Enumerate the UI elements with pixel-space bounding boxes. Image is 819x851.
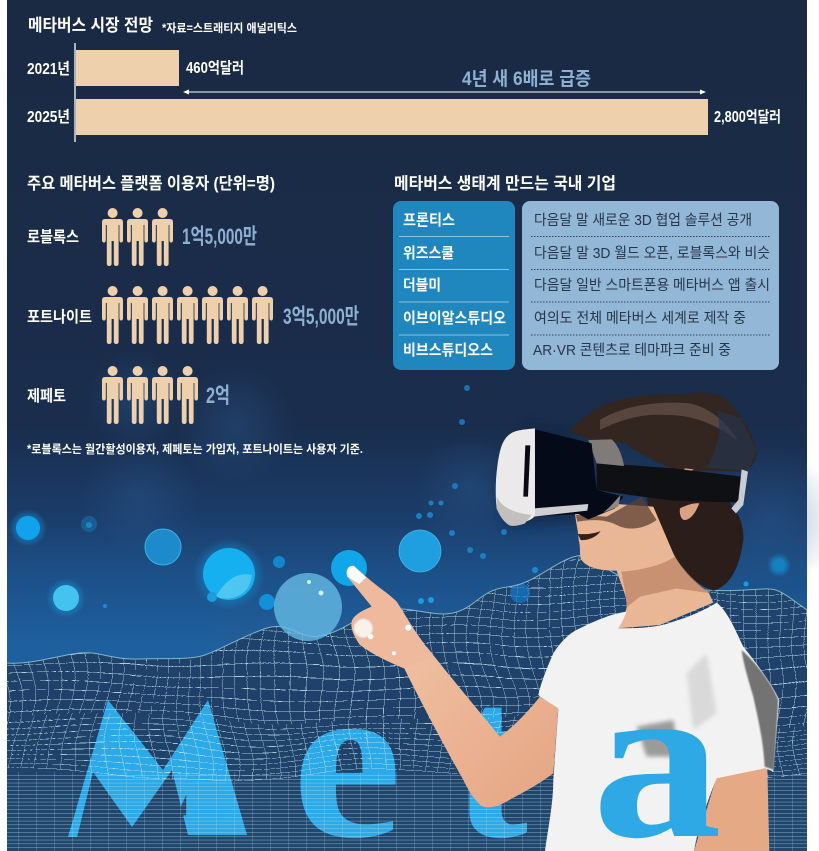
neck and face bbox=[575, 503, 713, 628]
source note: *자료=스트래티지 애널리틱스 bbox=[162, 21, 297, 35]
panel: company names: 위즈스쿨 bbox=[403, 245, 454, 262]
domestic companies section bbox=[393, 174, 779, 370]
heading: market outlook: 메타버스 시장 전망 bbox=[28, 16, 153, 35]
panel: company names bbox=[393, 201, 515, 370]
ear bbox=[680, 503, 699, 520]
panel: company plans bbox=[522, 201, 779, 370]
soft bokeh background bbox=[80, 350, 819, 685]
heading: domestic companies: 메타버스 생태계 만드는 국내 기업 bbox=[394, 174, 616, 193]
panel: company names: 더블미 bbox=[403, 277, 441, 294]
headset clasp bbox=[731, 469, 748, 513]
label: 2021: 2021년 bbox=[27, 60, 70, 78]
row: Roblox: 로블록스 bbox=[27, 228, 79, 246]
axis line bbox=[74, 43, 76, 142]
headset shadow bbox=[497, 423, 580, 528]
panel: company names: 이브이알스튜디오 bbox=[403, 310, 506, 327]
row: Fortnite bbox=[27, 286, 359, 344]
shirt shadow sleeve bbox=[742, 650, 778, 770]
bar: 2021 bbox=[76, 50, 179, 86]
hand bbox=[347, 566, 433, 668]
arrow heads bbox=[183, 90, 706, 94]
double arrow bbox=[187, 91, 702, 93]
row: Roblox bbox=[27, 208, 257, 266]
headset body bbox=[533, 429, 623, 519]
glowing bubbles bbox=[9, 385, 791, 618]
top hair bbox=[570, 393, 757, 472]
panel: company plans: 여의도 전체 메타버스 세계로 제작 중 bbox=[534, 310, 746, 327]
headset front bbox=[496, 428, 535, 523]
row: Roblox: 1억5,000만 bbox=[182, 224, 257, 249]
value: 2025: 2,800억달러 bbox=[714, 108, 781, 126]
panel: company plans: 다음달 말 3D 월드 오픈, 로블록스와 비슷 bbox=[534, 245, 770, 262]
boy wearing VR headset bbox=[347, 393, 779, 851]
panel: company names: 비브스튜디오스 bbox=[403, 342, 493, 359]
growth callout: 4년 새 6배로 급증 bbox=[462, 68, 591, 90]
market outlook section bbox=[27, 16, 781, 142]
hair highlights bbox=[600, 403, 738, 442]
strap bbox=[597, 463, 742, 503]
row: Zepeto bbox=[27, 366, 230, 424]
panel: company plans: AR·VR 콘텐츠로 테마파크 준비 중 bbox=[533, 342, 731, 359]
platform users section bbox=[27, 174, 363, 456]
row: Zepeto: 2억 bbox=[206, 383, 230, 408]
row: Zepeto: 제페토 bbox=[27, 387, 66, 405]
t-shirt bbox=[538, 603, 779, 851]
mesh landscape bbox=[0, 530, 819, 851]
mouth bbox=[578, 531, 601, 540]
headset rim bbox=[588, 439, 624, 466]
glowing fingertip bbox=[347, 566, 366, 584]
back hair bbox=[647, 493, 743, 591]
value: 2021: 460억달러 bbox=[186, 59, 244, 77]
headset gasket bbox=[534, 504, 588, 517]
row: Fortnite: 포트나이트 bbox=[27, 308, 92, 326]
row: Fortnite: 3억5,000만 bbox=[283, 304, 359, 329]
letters M e t behind mesh bbox=[68, 700, 527, 838]
panel: company plans: 다음달 말 새로운 3D 협업 솔루션 공개 bbox=[534, 212, 752, 229]
footnote: *로블록스는 월간활성이용자, 제페토는 가입자, 포트나이트는 사용자 기준. bbox=[27, 442, 363, 456]
translucent bubble over mesh bbox=[274, 573, 342, 641]
heading: platform users: 주요 메타버스 플랫폼 이용자 (단위=명) bbox=[27, 174, 275, 193]
shadow under headset bbox=[576, 497, 657, 529]
neck shading bbox=[622, 557, 710, 607]
right arm bbox=[694, 767, 769, 851]
bar: 2025 bbox=[76, 99, 708, 135]
label: 2025: 2025년 bbox=[27, 108, 70, 126]
panel: company names: 프론티스 bbox=[403, 212, 455, 229]
panel: company plans: 다음달 일반 스마트폰용 메타버스 앱 출시 bbox=[534, 277, 770, 294]
pointing arm bbox=[403, 647, 558, 807]
